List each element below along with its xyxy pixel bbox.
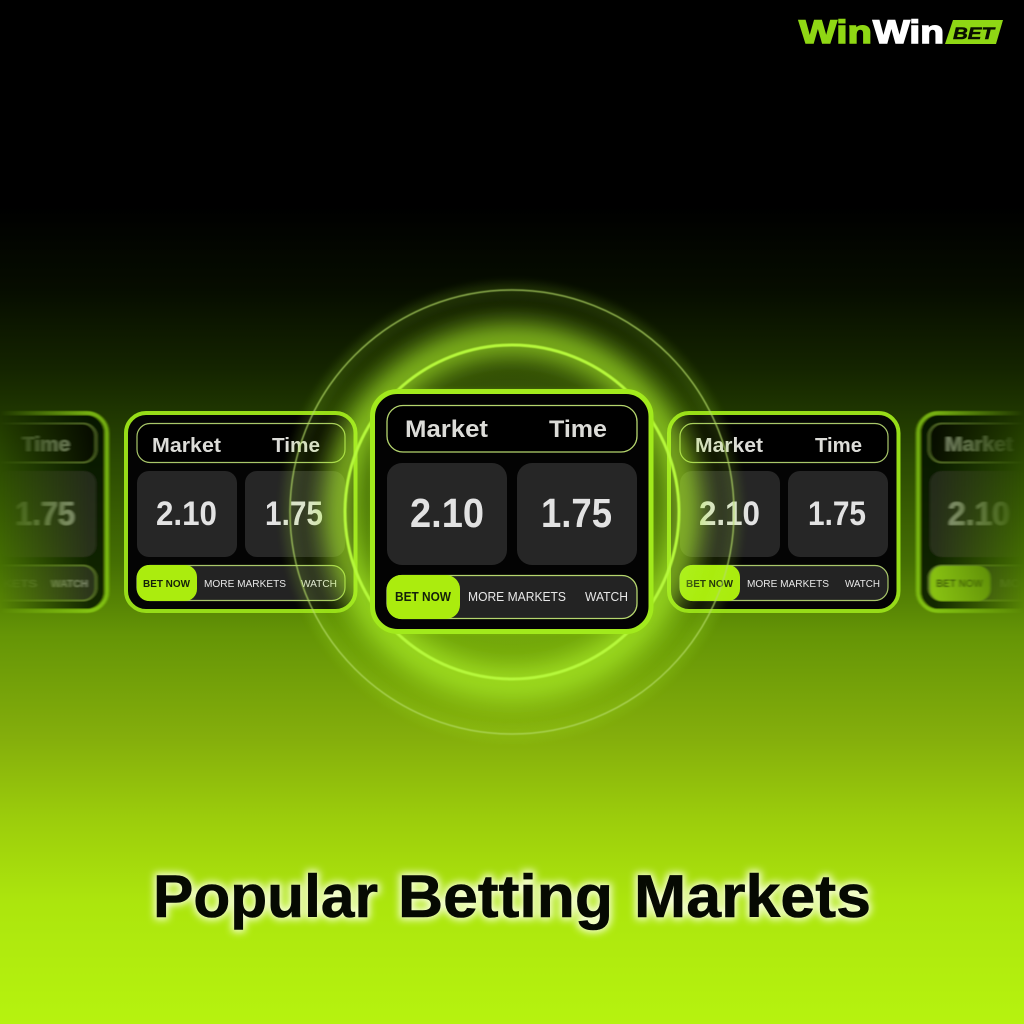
far left blurred card: Time	[22, 434, 70, 456]
right card odds: 1.75	[808, 495, 866, 533]
title	[153, 863, 871, 930]
far right blurred card	[918, 413, 1024, 611]
right card header	[680, 424, 888, 462]
logo: WinWin BET: Win	[873, 14, 944, 50]
right card header: Market	[695, 435, 763, 457]
center card header: Time	[549, 416, 607, 443]
left card header: Market	[152, 435, 221, 457]
left card header: Time	[272, 435, 320, 457]
left card button bar: WATCH	[301, 578, 337, 590]
center market card	[372, 392, 651, 632]
far left blurred card: 1.75	[15, 495, 75, 532]
right card button bar: BET NOW	[686, 578, 733, 590]
logo: WinWin BET: Win	[799, 14, 872, 50]
far left blurred card: WATCH	[51, 579, 88, 590]
center card odds: 2.10	[410, 490, 484, 536]
center card button bar: WATCH	[585, 590, 628, 604]
right card button bar	[680, 565, 888, 601]
title: Betting	[398, 863, 613, 930]
title: Markets	[634, 863, 871, 930]
center card odds	[387, 463, 637, 565]
center card header	[387, 406, 637, 452]
left card odds: 1.75	[265, 495, 323, 533]
center card button bar	[387, 575, 637, 619]
logo: WinWin BET: BET	[953, 24, 996, 43]
title: Popular	[153, 863, 378, 930]
far left blurred card	[0, 413, 107, 611]
center card odds: 1.75	[541, 490, 612, 536]
left card odds	[137, 471, 345, 557]
right card odds: 2.10	[699, 495, 760, 533]
center card header: Market	[405, 416, 488, 443]
right market card	[669, 413, 898, 611]
right card button bar: WATCH	[845, 578, 880, 590]
title: Betting	[398, 863, 613, 930]
left card button bar: MORE MARKETS	[204, 578, 286, 590]
far right blurred card: 2.10	[948, 495, 1010, 532]
left card button bar: BET NOW	[143, 578, 190, 590]
right card button bar: MORE MARKETS	[747, 578, 829, 590]
center card button bar: MORE MARKETS	[468, 590, 566, 604]
far right blurred card: Market	[945, 434, 1013, 456]
glowing concentric rings	[277, 277, 747, 747]
far left blurred card: KETS	[3, 579, 37, 590]
title: Popular	[153, 863, 378, 930]
title: Markets	[634, 863, 871, 930]
center card button bar: BET NOW	[395, 590, 451, 604]
left card button bar	[137, 565, 345, 601]
left card odds: 2.10	[156, 495, 217, 533]
far right blurred card: BET NOW	[936, 578, 984, 590]
right card odds	[680, 471, 888, 557]
right card header: Time	[815, 435, 862, 457]
logo: WinWin BET	[799, 14, 1003, 50]
left market card	[126, 413, 356, 611]
left card header	[137, 424, 345, 462]
